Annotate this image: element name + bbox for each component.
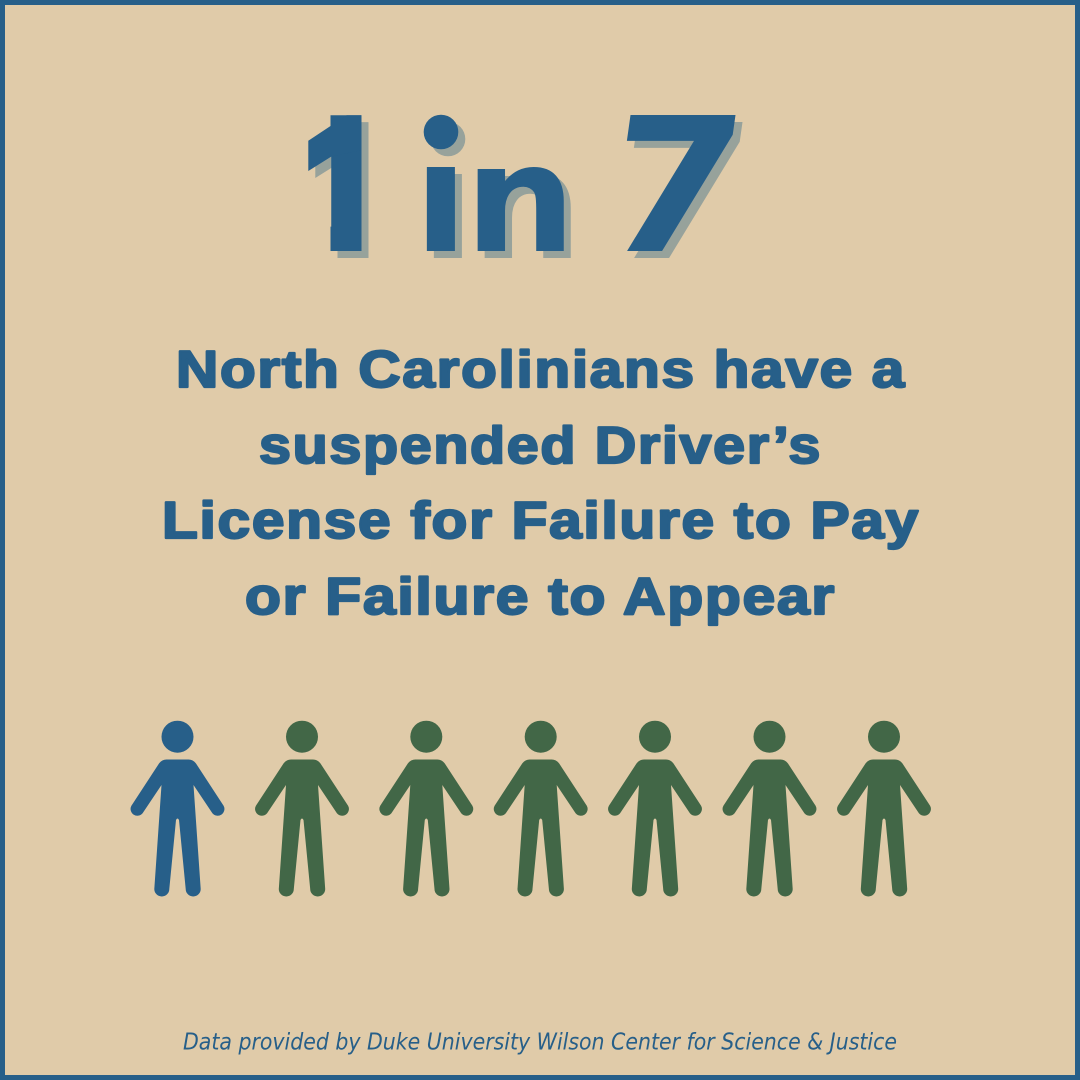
title main text: i (413, 109, 468, 288)
icon: person green 6 (837, 721, 931, 897)
icon: person green 1 (255, 721, 349, 897)
title shadow: i (420, 116, 475, 295)
title main text: 1 (278, 77, 409, 296)
title main text: n (464, 113, 576, 287)
icon: person green 4 (608, 721, 702, 897)
title main text (308, 114, 736, 251)
icon: person green 5 (723, 721, 816, 897)
row of seven people icons (131, 721, 931, 897)
footer source note: Data provided by Duke University Wilson Center for Science & Justice (183, 1028, 897, 1056)
icon: person highlighted blue (131, 721, 224, 897)
subheading: License for Failure to Pay (162, 492, 920, 550)
title shadow: n (472, 120, 583, 294)
title shadow (315, 122, 742, 258)
icon: person green 3 (494, 721, 588, 897)
subheading (162, 341, 920, 626)
title: 1 in 7 (308, 114, 742, 258)
subheading: suspended Driver’s (259, 417, 822, 475)
title main text: 7 (592, 79, 756, 296)
subheading: North Carolinians have a (176, 341, 906, 399)
title shadow: 7 (599, 86, 763, 303)
subheading: or Failure to Appear (245, 568, 836, 626)
icon: person green 2 (379, 721, 473, 897)
title shadow: 1 (285, 84, 416, 303)
